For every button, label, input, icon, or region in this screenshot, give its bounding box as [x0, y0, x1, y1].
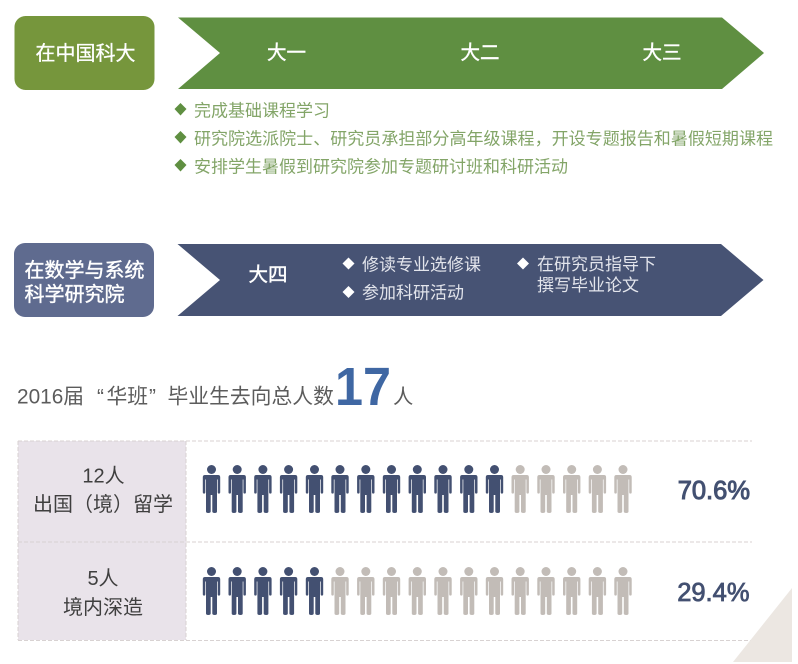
decorative corner triangle: [733, 588, 792, 662]
year three: 大三: [642, 42, 682, 64]
label: at mathematics institute: [14, 243, 154, 317]
heading: graduate destinations: 毕业生去向总人数: [168, 386, 334, 408]
year four items: [342, 255, 656, 302]
year two: 大二: [460, 42, 500, 64]
heading: graduate destinations: 人: [393, 386, 413, 408]
table background: category cells: [18, 441, 186, 640]
row label: domestic study: 境内深造: [63, 596, 143, 619]
row label: studying abroad: [33, 464, 173, 516]
heading: graduate destinations: ”: [149, 386, 156, 408]
bullet list: USTC curriculum: [174, 102, 773, 176]
arrow banner: year four: [178, 244, 764, 316]
percentage: 29.4%: 29.4%: [677, 579, 750, 607]
percentage: 70.6%: 70.6%: [678, 477, 750, 505]
heading: graduate destinations: 华班: [106, 386, 148, 408]
label: at USTC: [14, 16, 154, 90]
year one: 大一: [267, 42, 306, 64]
label: at mathematics institute: 在数学与系统: [24, 259, 144, 282]
row label: domestic study: [63, 567, 143, 619]
heading: graduate destinations: [17, 357, 413, 417]
bullet 3: 安排学生暑假到研究院参加专题研讨班和科研活动: [194, 158, 568, 176]
row label: studying abroad: 出国（境）留学: [33, 493, 173, 516]
year four items: 修读专业选修课: [362, 256, 481, 274]
row label: studying abroad: 12人: [82, 464, 125, 488]
bullet 1: 完成基础课程学习: [194, 102, 330, 120]
pictogram row: 12 of 17 abroad: [203, 465, 632, 513]
year four label: 大四: [248, 264, 288, 286]
heading: graduate destinations: “: [97, 386, 104, 408]
big number 17: 17: [335, 357, 391, 417]
heading: graduate destinations: 2016届: [17, 386, 84, 408]
bullet 2: 研究院选派院士、研究员承担部分高年级课程，开设专题报告和暑假短期课程: [194, 130, 773, 148]
year four items: 参加科研活动: [362, 284, 464, 302]
pictogram row: 5 of 17 domestic: [203, 567, 632, 615]
row label: domestic study: 5人: [87, 567, 119, 590]
arrow banner: years one to three: [178, 18, 764, 89]
year four items: 撰写毕业论文: [537, 276, 639, 295]
label: at USTC: 在中国科大: [36, 42, 136, 65]
label: at mathematics institute: 科学研究院: [24, 283, 124, 306]
year four items: 在研究员指导下: [537, 255, 656, 274]
